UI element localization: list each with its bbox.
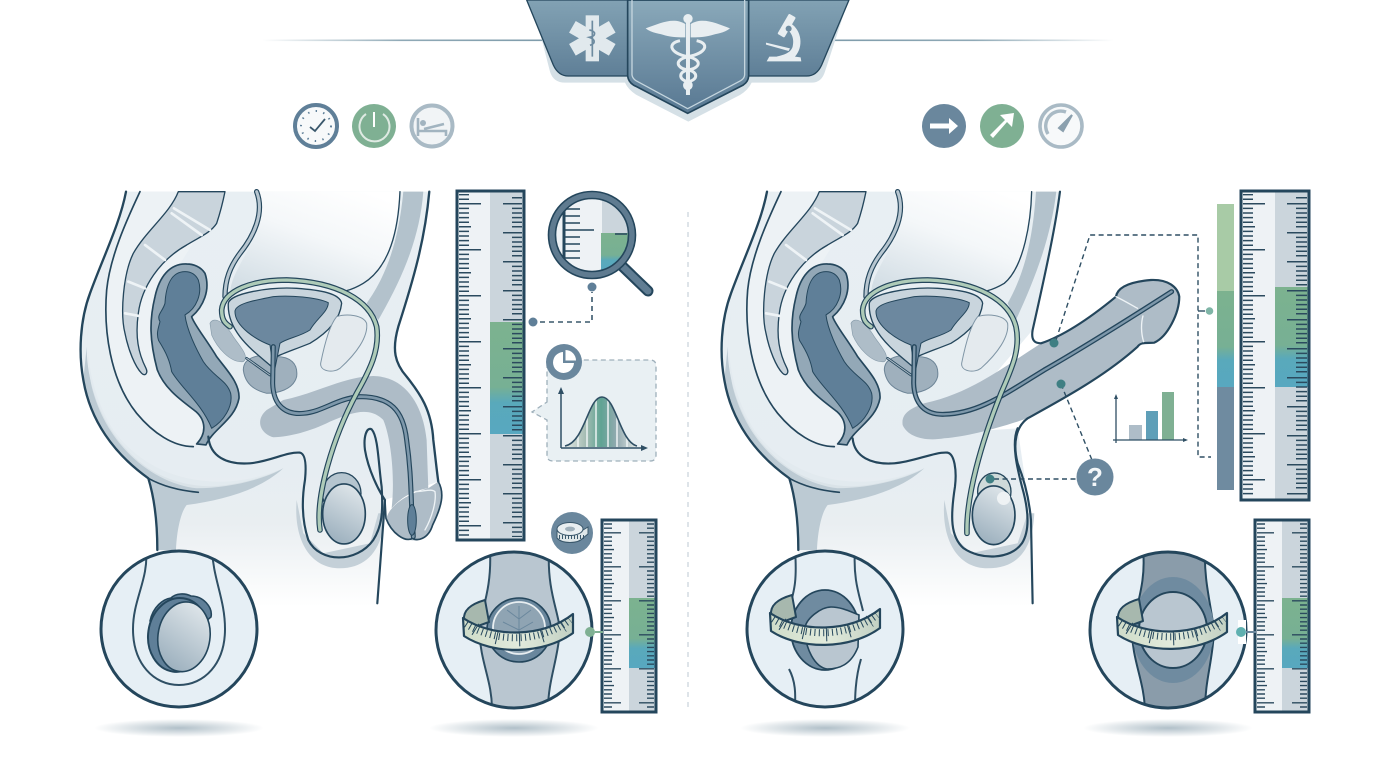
measuring tape	[463, 600, 573, 650]
cavity contour	[347, 192, 400, 291]
shaft	[479, 550, 560, 710]
anatomy base	[722, 192, 1008, 550]
icon: question mark: ?	[1087, 462, 1103, 492]
panel: distribution chart	[532, 344, 656, 461]
front contour	[395, 192, 438, 482]
size scale bar	[1217, 204, 1234, 490]
icon: bed	[412, 106, 452, 146]
connector: dashed bracket	[994, 235, 1211, 479]
connector: ruler to magnifier	[528, 282, 596, 326]
bar chart	[1113, 392, 1188, 443]
header rule left	[262, 40, 542, 41]
highlighted range	[490, 322, 523, 434]
epididymis	[149, 593, 212, 622]
urethra	[273, 347, 413, 537]
circle detail: right cross-section	[747, 549, 903, 709]
testis	[146, 597, 200, 673]
icon: question mark	[1076, 458, 1114, 496]
panel: left anatomy	[81, 192, 442, 607]
bell curve bars	[565, 397, 637, 447]
organ body	[902, 280, 1179, 439]
glans	[387, 482, 442, 540]
lower tissue halo	[944, 500, 1034, 568]
ruler: right main	[1241, 191, 1309, 500]
ruler: left main	[457, 191, 524, 540]
axes	[561, 390, 645, 448]
icon: tape measure	[551, 512, 593, 554]
measuring tape	[1117, 599, 1227, 649]
circle detail: left cross-section	[101, 549, 257, 707]
callout: magnifier	[548, 192, 648, 291]
spermatic duct	[863, 280, 1017, 533]
testis	[322, 473, 361, 514]
measuring tape	[770, 595, 880, 645]
ruler: right small	[1255, 520, 1309, 712]
right banner	[748, 0, 849, 76]
body fill	[722, 192, 1060, 607]
anatomy base	[81, 192, 367, 550]
contour	[133, 549, 225, 685]
icon: power progress	[352, 104, 396, 148]
cross-section	[791, 590, 859, 670]
circle detail: left girth	[436, 550, 592, 710]
icon: pie	[546, 344, 582, 380]
cavity contour	[988, 192, 1032, 291]
lower tissue halo	[296, 500, 385, 568]
spermatic duct	[222, 280, 377, 530]
abdominal wall band	[367, 192, 423, 320]
central shield	[628, 0, 749, 113]
icon: arrow right	[922, 104, 966, 148]
measurement points	[986, 307, 1213, 484]
circle detail: right girth	[1090, 550, 1246, 710]
ground shadows	[94, 719, 1253, 737]
connector: left girth	[585, 627, 603, 637]
organ body	[260, 376, 428, 508]
icon: arrow up right	[980, 104, 1024, 148]
testis	[978, 473, 1011, 510]
abdominal wall band	[1008, 192, 1056, 320]
icon: caduceus	[646, 14, 730, 95]
skin outline	[208, 429, 385, 603]
cross-section	[1132, 577, 1214, 683]
centre divider	[687, 212, 689, 708]
left banner	[527, 0, 628, 76]
connector: right girth	[1236, 620, 1256, 644]
urethra	[914, 292, 1172, 414]
highlighted range	[1275, 287, 1308, 387]
icon: microscope	[766, 14, 801, 61]
skin outline	[1015, 192, 1179, 603]
highlighted range	[1282, 598, 1308, 668]
icon: clock	[295, 105, 337, 147]
highlighted range	[629, 598, 655, 668]
cross-section	[487, 598, 551, 662]
header emblem	[527, 0, 849, 122]
abdominal cavity	[871, 192, 1032, 295]
abdominal cavity	[230, 192, 400, 295]
icon: star of life	[569, 15, 616, 61]
bell curve	[565, 397, 637, 446]
panel: right anatomy	[722, 192, 1179, 607]
glans detail	[1116, 297, 1144, 342]
ruler: left small	[602, 520, 656, 712]
body fill	[81, 192, 438, 607]
header rule right	[834, 40, 1114, 41]
icon: gauge	[1040, 105, 1082, 147]
